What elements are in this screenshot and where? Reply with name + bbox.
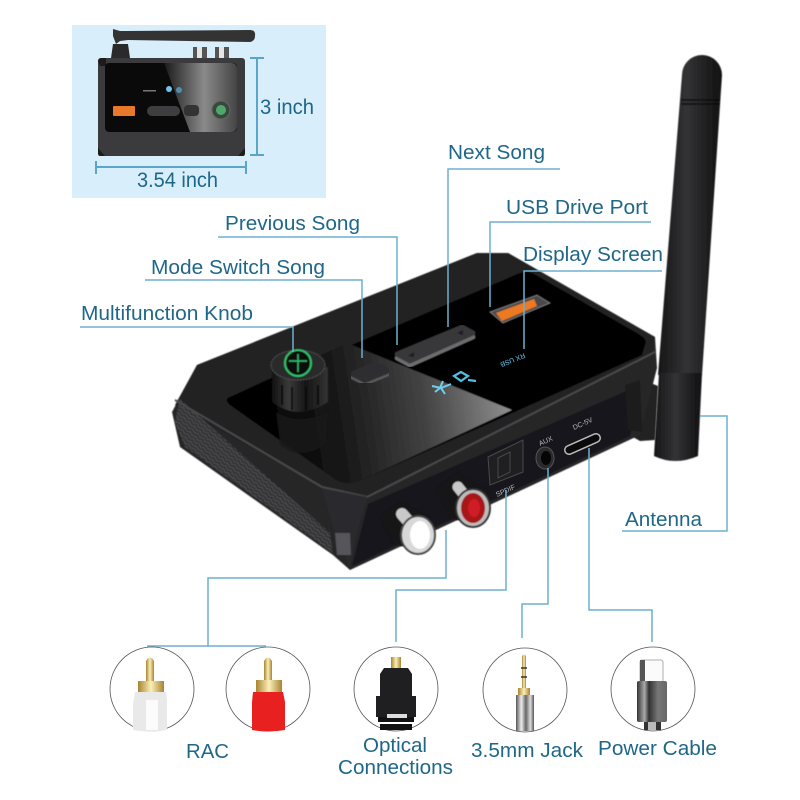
icon: antenna	[654, 55, 722, 461]
connector: USB-C plug	[611, 647, 695, 731]
silhouette	[172, 253, 657, 570]
glossy screen	[227, 272, 646, 483]
label: mode switch song: Mode Switch Song	[151, 257, 325, 279]
icon: top view antenna	[111, 29, 255, 58]
connector: red RCA plug	[226, 647, 310, 732]
label: RAC: RAC	[186, 741, 229, 763]
width marker	[96, 161, 246, 174]
panel: dimensions	[72, 25, 326, 198]
label: optical connections	[338, 735, 453, 779]
next and previous button	[397, 327, 473, 365]
antenna knuckle	[612, 378, 658, 441]
display icons: RX USB	[499, 351, 526, 368]
connector: optical plug	[354, 647, 438, 731]
icon: top view device	[98, 58, 245, 156]
white RCA socket	[380, 502, 435, 554]
front panel	[352, 385, 640, 566]
label: optical connections: Optical	[363, 735, 427, 757]
side seam	[175, 352, 655, 497]
rear hinge	[625, 380, 642, 432]
mode button	[353, 365, 387, 382]
device body	[172, 253, 658, 570]
red RCA socket	[437, 473, 490, 527]
height marker	[250, 58, 264, 155]
AUX port	[536, 435, 554, 469]
top frame edge	[175, 253, 655, 497]
label: optical connections: Connections	[338, 757, 453, 779]
USB port	[490, 295, 550, 323]
corner block	[335, 533, 351, 555]
power port: DC-5V	[572, 417, 594, 432]
connector: 3.5mm jack	[483, 648, 567, 732]
power port	[569, 417, 596, 450]
display icons	[432, 351, 526, 394]
panel: carbon side grip	[175, 399, 333, 553]
AUX port: AUX	[538, 435, 554, 448]
height label: 3 inch	[260, 96, 314, 119]
knob	[271, 350, 328, 453]
label: USB drive port: USB Drive Port	[506, 197, 648, 219]
label: multifunction knob: Multifunction Knob	[81, 303, 253, 325]
label: next song: Next Song	[448, 142, 545, 164]
width label: 3.54 inch	[137, 169, 218, 192]
corner facet	[322, 488, 367, 568]
optical port	[488, 440, 523, 499]
callout lines	[80, 169, 727, 646]
connector: white RCA plug	[110, 647, 194, 732]
icon: top view RCA sockets	[193, 47, 229, 59]
label: 3.5mm jack: 3.5mm Jack	[471, 740, 584, 762]
label: antenna: Antenna	[625, 509, 703, 531]
label: power cable: Power Cable	[598, 738, 717, 760]
label: display screen: Display Screen	[523, 244, 663, 266]
label: previous song: Previous Song	[225, 213, 360, 235]
optical port: SPDIF	[495, 484, 517, 499]
screen reflection	[228, 343, 512, 483]
